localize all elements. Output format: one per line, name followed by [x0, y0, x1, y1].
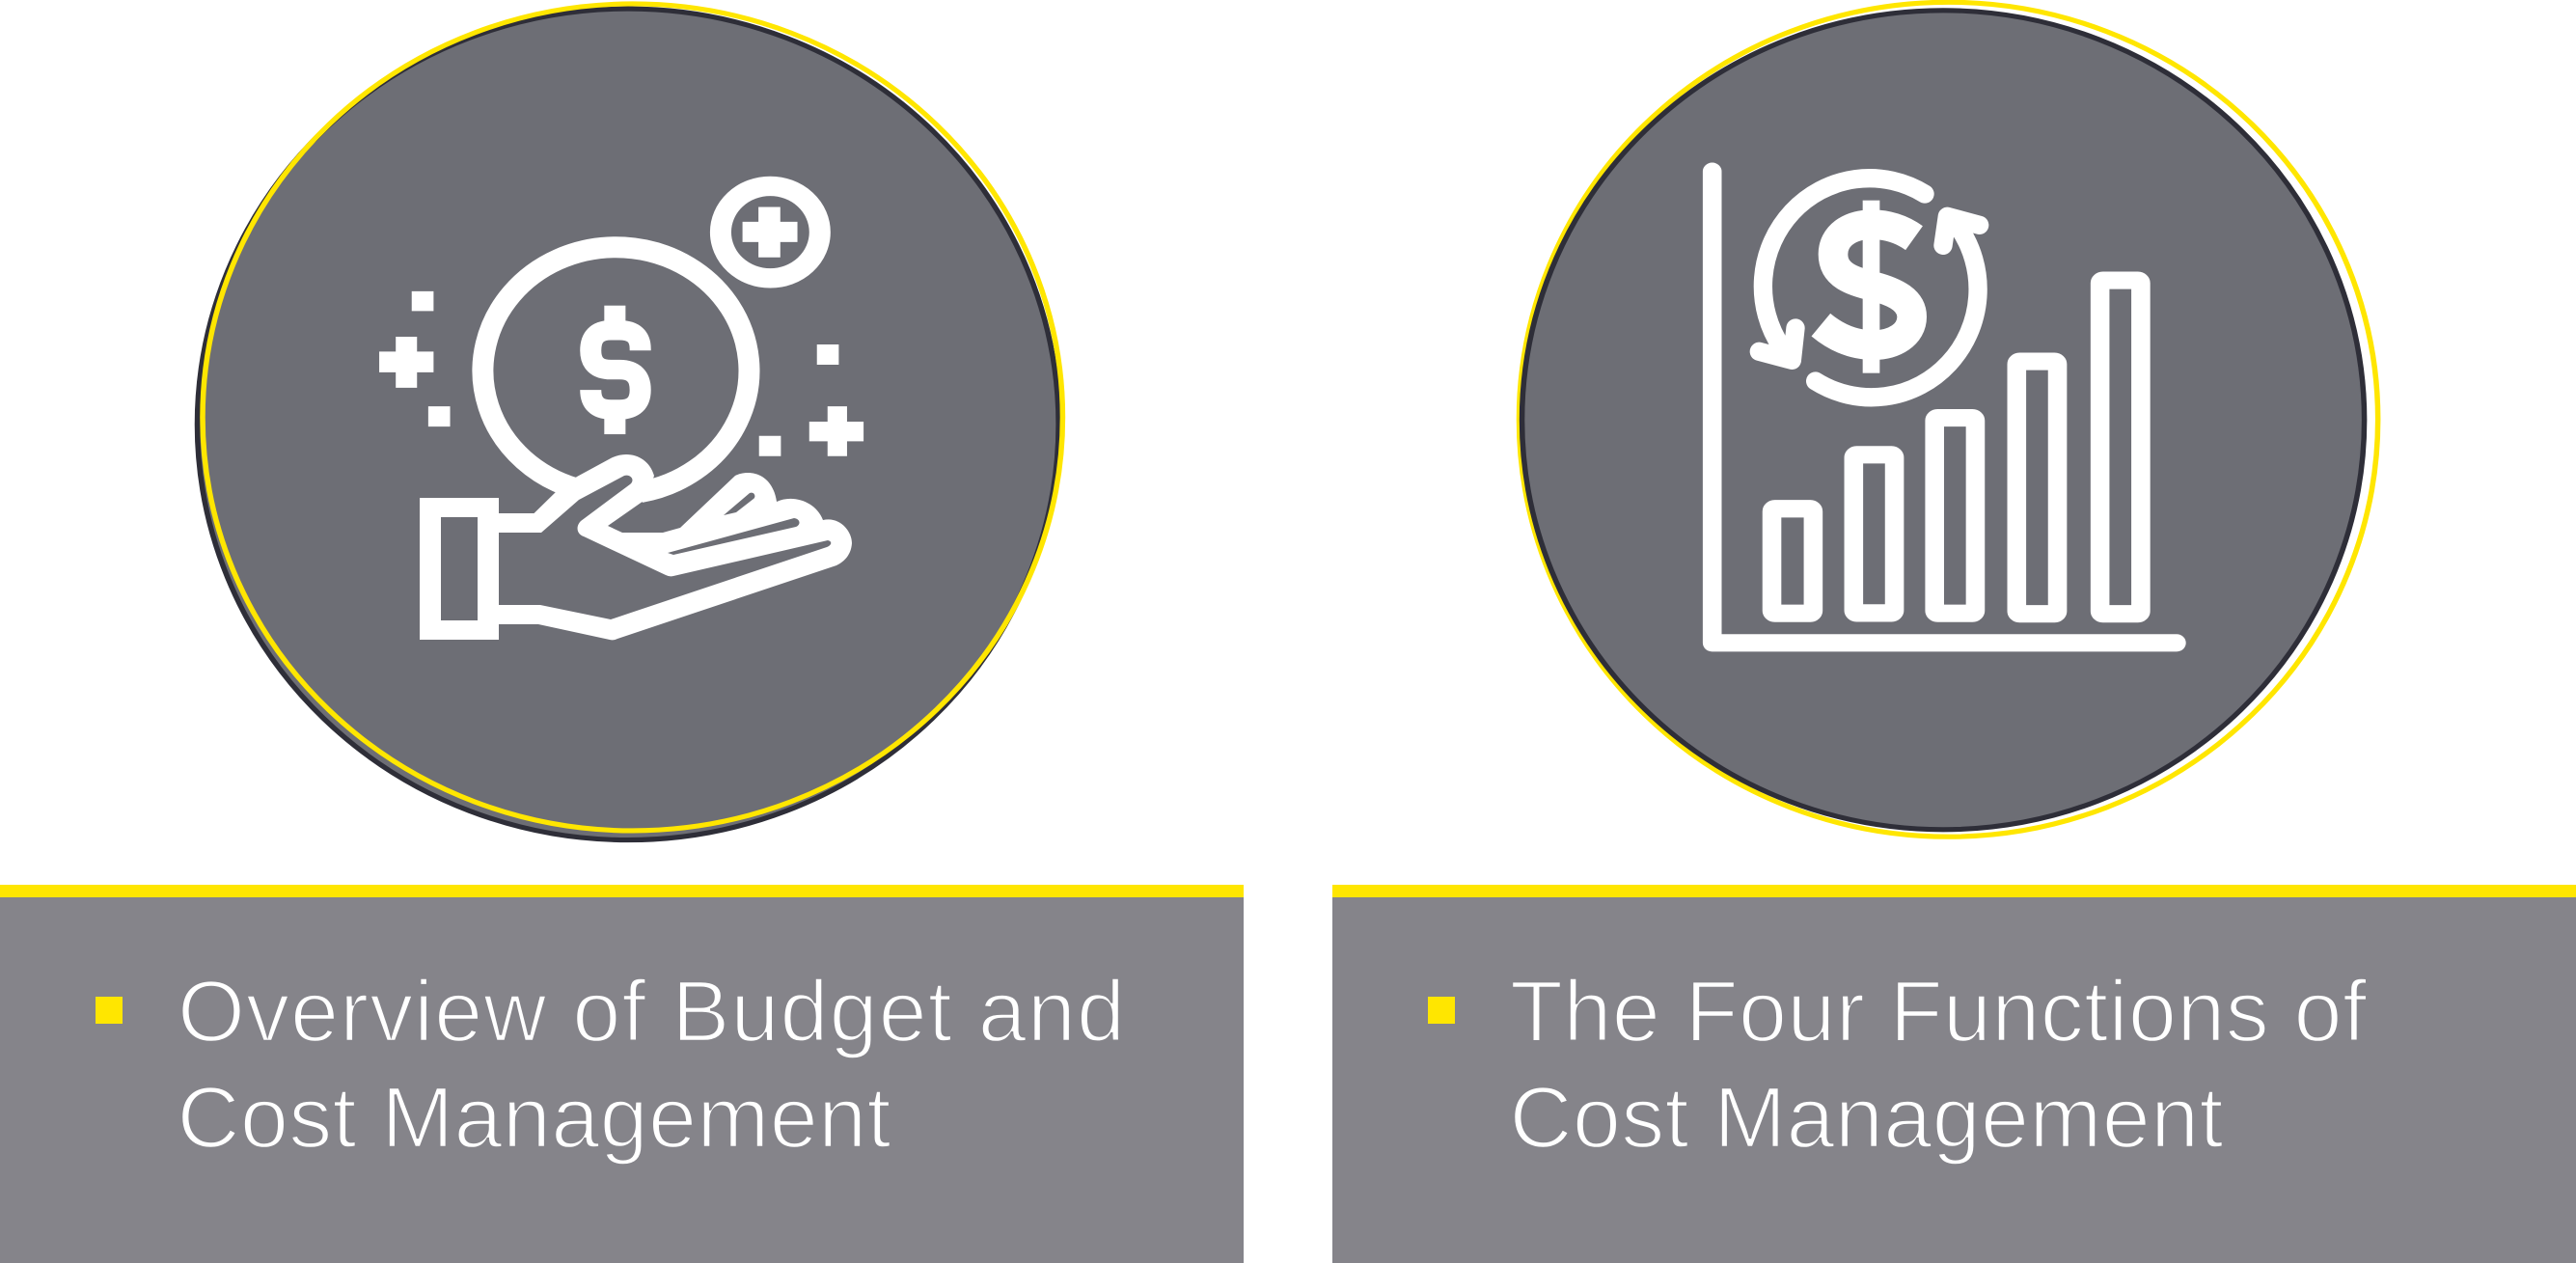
dollar sign	[590, 306, 641, 434]
circular arrows	[1759, 178, 1980, 398]
caption text: Cost Management	[178, 1070, 891, 1167]
caption text: Cost Management	[1509, 1070, 2223, 1167]
icon: hand holding dollar coin	[379, 186, 863, 640]
caption text: The Four Functions of	[1510, 964, 2368, 1060]
caption text	[178, 964, 1125, 1167]
bullet	[1428, 997, 1455, 1024]
small plus coin	[721, 186, 820, 278]
bullet	[96, 997, 123, 1024]
chart bars	[1772, 281, 2141, 614]
chart axes	[1713, 172, 2177, 643]
badge: cost functions circle	[1519, 2, 2378, 837]
icon: growing bar chart	[1713, 172, 2177, 643]
caption text: Overview of Budget and	[178, 964, 1125, 1060]
icon: circular dollar arrows	[1759, 178, 1980, 398]
shirt cuff	[420, 498, 499, 640]
hand outline	[499, 454, 852, 640]
caption text	[1509, 964, 2368, 1167]
panel: budget overview caption	[0, 885, 1244, 1263]
badge: budget overview circle	[197, 4, 1062, 840]
coin ring	[482, 247, 749, 492]
panel: four functions caption	[1332, 885, 2576, 1263]
sparkle plus right	[809, 406, 863, 456]
dollar sign	[1821, 201, 1914, 373]
sparkle squares	[412, 291, 838, 456]
sparkle plus left	[379, 337, 433, 388]
